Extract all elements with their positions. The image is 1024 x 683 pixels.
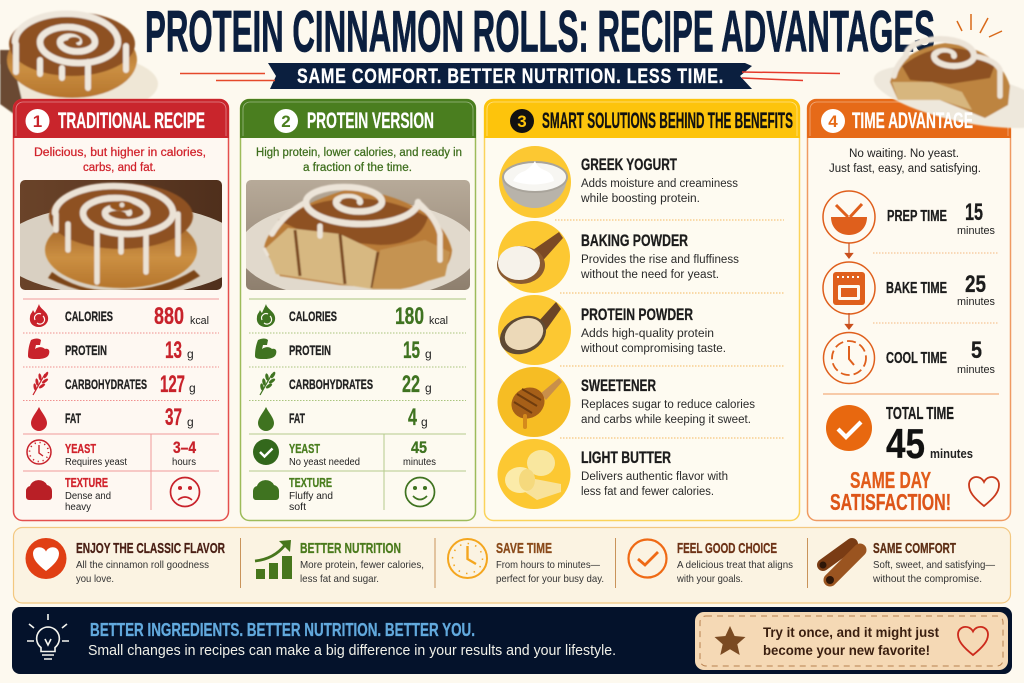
item: greek yogurt: GREEK YOGURT [581,155,677,174]
row: fat: FAT [289,410,305,426]
icon: check circle [628,540,666,578]
icon: dense roll [26,480,52,500]
icon: muscle [255,338,276,359]
row: carbohydrates: 127 [160,371,185,398]
row: protein: PROTEIN [65,342,107,358]
benefit: feel good choice: FEEL GOOD CHOICE [677,540,777,557]
row: calories: 880 [154,303,184,330]
row: texture: TEXTURE [289,475,332,490]
row: fat: g [187,415,194,429]
item: sweetener [498,367,755,437]
icon: muscle [28,338,49,359]
step: cool time: 5 [971,337,982,364]
callout: try it once [695,612,1008,670]
icon: heart pin [26,538,66,579]
callout: same day satisfaction: SAME DAY [850,467,931,493]
row: carbohydrates [33,371,196,398]
icon: flame [30,304,48,327]
item: greek yogurt [499,146,738,218]
row: calories: CALORIES [289,308,337,324]
step: bake time: minutes [957,296,995,308]
row: carbohydrates: CARBOHYDRATES [289,376,373,392]
panel header: protein version: 2 [281,112,291,131]
item: sweetener: and carbs while keeping it sweet. [581,414,751,426]
row: carbohydrates: CARBOHYDRATES [65,376,147,392]
benefit: feel good choice: with your goals. [676,573,743,585]
benefit: feel good choice: A delicious treat that aligns [677,559,793,571]
item: light butter [498,439,728,509]
row: yeast [27,438,196,468]
row: yeast: 45 [411,438,427,457]
panel: time advantage [807,99,1011,520]
benefit: better nutrition: BETTER NUTRITION [300,540,401,557]
row: texture [253,475,434,513]
panel: smart solutions [484,99,800,520]
row: fat [258,404,428,431]
row: fat: g [421,415,428,429]
arrow: prep to bake [846,243,852,258]
row: protein [255,337,432,364]
total time [826,403,973,467]
row: calories: kcal [429,315,448,327]
panel header: smart solutions [484,99,800,138]
panel: traditional recipe [12,98,230,522]
photo: protein cinnamon roll [246,180,470,290]
panel header: smart solutions: SMART SOLUTIONS BEHIND THE BENEFITS [542,108,793,133]
callout: try it once: become your new favorite! [763,642,930,658]
item: greek yogurt: Adds moisture and creaminess [581,178,738,190]
row: fat: FAT [65,410,81,426]
sparkle marks [957,14,1002,37]
benefit: save time: perfect for your busy day. [496,573,604,585]
icon: fluffy roll [253,480,279,500]
row: texture [26,475,200,513]
row: calories: kcal [190,315,209,327]
footer banner: BETTER INGREDIENTS. BETTER NUTRITION. BETTER YOU. [90,619,475,640]
icon: clock [27,440,51,464]
icon: light bulb [27,614,69,659]
panel header: traditional recipe: TRADITIONAL RECIPE [58,108,205,133]
photo: traditional cinnamon roll [20,180,222,290]
icon: flame [257,304,275,327]
step: prep time: PREP TIME [887,208,947,225]
item: light butter: LIGHT BUTTER [581,448,671,467]
item: protein powder: PROTEIN POWDER [581,305,693,324]
row: yeast: hours [172,457,196,468]
panel header: protein version: PROTEIN VERSION [307,108,434,133]
row: yeast [253,438,436,468]
benefit: classic flavor [26,538,225,585]
item: light butter: less fat and fewer calories. [581,486,714,498]
benefit: save time [448,539,604,585]
benefit: classic flavor: All the cinnamon roll goodness [76,559,209,571]
row: yeast: minutes [403,457,436,468]
panel intro text: Just fast, easy, and satisfying. [829,163,981,175]
benefit: classic flavor: you love. [76,573,114,585]
benefit: same comfort: Soft, sweet, and satisfying— [873,559,995,571]
photo: cinnamon roll top left [0,12,158,116]
icon: check badge [253,439,279,465]
panel header: time advantage: 4 [828,112,838,131]
benefit: classic flavor: ENJOY THE CLASSIC FLAVOR [76,540,225,557]
step: prep time [823,191,995,243]
row: yeast: YEAST [289,441,320,456]
icon: timer [824,332,874,384]
step: bake time: BAKE TIME [886,280,947,297]
icon: cinnamon sticks [820,544,860,584]
total time: 45 [886,420,925,467]
row: carbohydrates: g [425,381,432,395]
row: fat: 4 [408,404,417,431]
item: baking powder: BAKING POWDER [581,231,688,250]
callout: same day satisfaction: SATISFACTION! [830,489,951,515]
icon: wheat [260,371,276,395]
total time: minutes [930,446,973,461]
icon: drop [31,407,47,431]
panel header: traditional recipe: 1 [33,112,42,131]
step: cool time: COOL TIME [886,350,947,367]
panel intro text: No waiting. No yeast. [849,148,959,160]
row: protein [28,337,194,364]
icon: scoop of protein powder [494,295,571,365]
row: protein: g [425,347,432,361]
benefit: same comfort: SAME COMFORT [873,540,956,557]
benefit: better nutrition [255,540,424,585]
panel intro text: High protein, lower calories, and ready in [256,147,462,159]
item: baking powder [497,221,739,293]
arrow: bake to cool [846,313,852,329]
row: texture: soft [289,502,306,513]
icon: growth chart [255,540,292,579]
item: baking powder: without the need for yeast. [580,269,719,281]
callout: same day satisfaction [830,467,999,515]
row: calories [30,303,209,330]
row: carbohydrates [260,371,432,398]
icon: yogurt bowl [499,146,571,218]
icon: heart outline [958,627,988,655]
item: baking powder: Provides the rise and fluffiness [581,254,739,266]
icon: happy face [406,478,434,506]
row: calories: 180 [395,303,424,330]
step: bake time: 25 [965,271,986,298]
row: texture: heavy [65,502,91,513]
row: texture: TEXTURE [65,475,108,490]
photo: bitten cinnamon roll top right [869,39,1024,141]
step: prep time: minutes [957,225,995,237]
icon: honey dipper [498,367,570,437]
icon: scoop of baking powder [497,221,570,293]
panel intro text: Delicious, but higher in calories, [34,147,206,159]
step: prep time: 15 [965,199,983,226]
row: fat: 37 [165,404,182,431]
row: carbohydrates: g [189,381,196,395]
panel header: protein version [240,99,476,138]
panel header: time advantage [807,99,1011,138]
panel intro text [829,148,981,175]
row: fat [31,404,194,431]
row: yeast: Requires yeast [65,457,127,468]
item: sweetener: Replaces sugar to reduce calories [581,399,755,411]
panel header: smart solutions: 3 [517,112,527,131]
icon: drop [258,407,274,431]
panel intro text: carbs, and fat. [83,162,156,174]
footer banner [12,607,1012,674]
icon: mixing bowl [823,191,875,243]
benefit: save time: SAVE TIME [496,540,552,557]
row: protein: PROTEIN [289,342,331,358]
icon: star [714,626,746,655]
row: protein: 15 [403,337,420,364]
row: texture: Dense and [65,491,111,502]
step: cool time [824,332,995,384]
benefit: feel good choice [628,540,793,585]
item: protein powder [494,295,726,365]
icon: clock [448,539,487,578]
row: protein: g [187,347,194,361]
row: texture: Fluffy and [289,491,333,502]
panel intro text [34,147,206,174]
row: calories [257,303,448,330]
panel: protein version [238,99,478,520]
benefits strip [14,528,1010,603]
benefit: better nutrition: More protein, fewer calories, [300,559,424,571]
panel intro text [256,147,462,174]
panel header: traditional recipe [13,99,229,138]
step: cool time: minutes [957,364,995,376]
item: protein powder: Adds high-quality protein [581,328,714,340]
benefit: save time: From hours to minutes— [496,559,600,571]
icon: sad face [170,478,200,506]
row: protein: 13 [165,337,182,364]
panel intro text: a fraction of the time. [303,162,412,174]
row: calories: CALORIES [65,308,113,324]
item: sweetener: SWEETENER [581,376,656,395]
benefit: same comfort: without the compromise. [872,573,982,585]
item: protein powder: without compromising taste. [580,343,726,355]
benefit: better nutrition: less fat and sugar. [300,573,379,585]
step: bake time [823,262,995,314]
total time: TOTAL TIME [886,403,954,423]
callout: try it once: Try it once, and it might just [763,624,939,640]
icon: oven [823,262,875,314]
item: greek yogurt: while boosting protein. [580,193,700,205]
icon: heart outline [969,477,999,506]
icon: butter curls [498,439,570,509]
row: yeast: 3–4 [173,438,196,457]
subtitle ribbon: SAME COMFORT. BETTER NUTRITION. LESS TIME. [297,65,724,88]
item: light butter: Delivers authentic flavor with [581,471,728,483]
row: yeast: YEAST [65,441,96,456]
benefit: same comfort [820,540,995,585]
row: carbohydrates: 22 [402,371,420,398]
row: yeast: No yeast needed [289,457,360,468]
footer banner: Small changes in recipes can make a big difference in your results and your lifestyle. [88,643,616,659]
icon: check badge [826,405,872,451]
icon: wheat [33,371,49,395]
